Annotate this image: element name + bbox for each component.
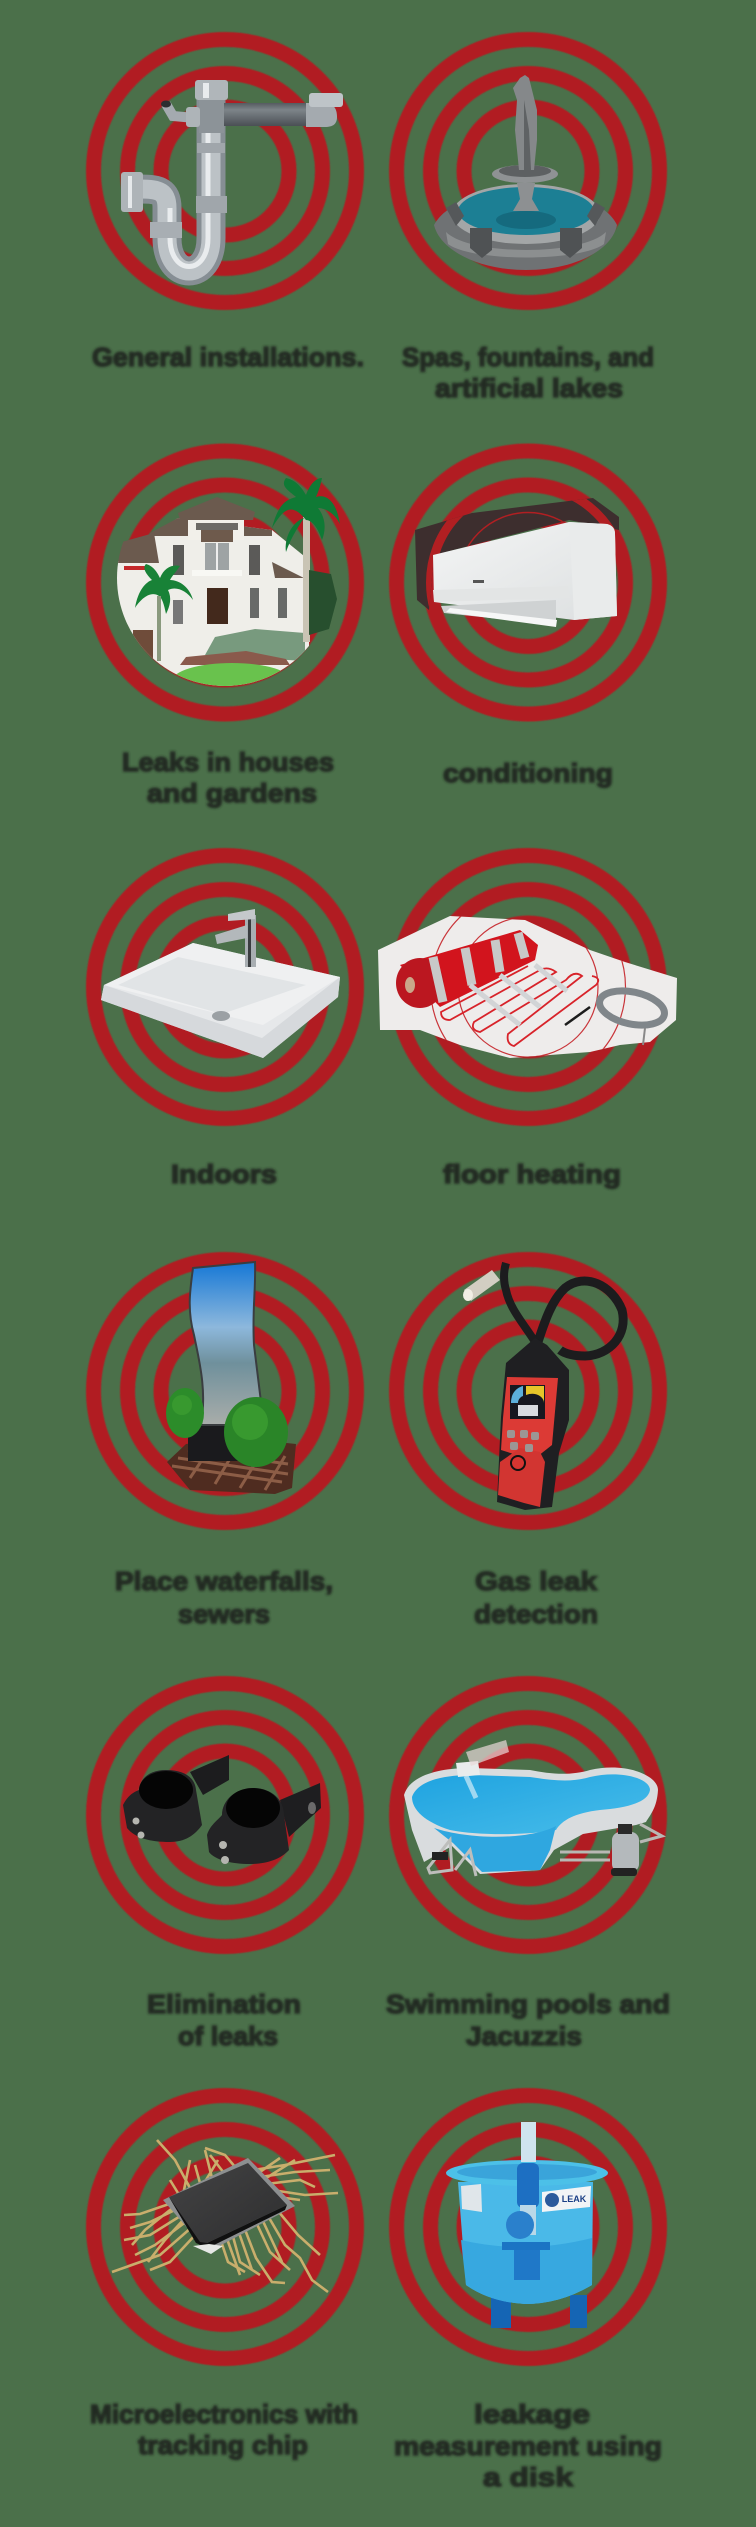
icon: black pipe clamps (123, 1755, 321, 1864)
target rings (396, 2096, 660, 2358)
label: sewers (178, 1599, 270, 1629)
label (402, 342, 654, 403)
target rings (396, 856, 660, 1118)
target rings (94, 40, 356, 302)
icon: house with palm trees (116, 478, 340, 699)
panel: floor heating (378, 856, 677, 1189)
label: Elimination (147, 1989, 301, 2019)
label: measurement using (394, 2431, 662, 2461)
panel: elimination of leaks (94, 1684, 356, 2051)
label: tracking chip (138, 2430, 308, 2460)
label: of leaks (178, 2021, 278, 2051)
label: Swimming pools and (386, 1989, 670, 2019)
icon: split air conditioner (415, 498, 619, 627)
target rings (94, 1260, 356, 1522)
label (474, 1566, 598, 1629)
icon: tracking microchip with gold traces (112, 2140, 338, 2292)
label (90, 2399, 358, 2460)
label (386, 1989, 670, 2051)
label: leakage (474, 2399, 590, 2429)
panel: swimming pools and jacuzzis (386, 1684, 670, 2051)
panel: microelectronics (90, 2096, 358, 2460)
target rings (94, 1684, 356, 1946)
icon: swimming pool with filter pump (404, 1740, 662, 1876)
label: artificial lakes (435, 373, 623, 403)
icon: blue leak measurement tank (446, 2122, 608, 2328)
label: Leaks in houses (122, 747, 334, 777)
label: Jacuzzis (466, 2021, 582, 2051)
label: Spas, fountains, and (402, 342, 654, 372)
panel: gas leak detection (396, 1260, 660, 1629)
label (394, 2399, 662, 2492)
label: and gardens (147, 778, 317, 808)
target rings (94, 2096, 356, 2358)
label (122, 747, 334, 808)
panel: leaks in houses and gardens (94, 451, 356, 808)
target rings (396, 1260, 660, 1522)
icon: chrome sink trap pipe (121, 80, 343, 271)
panel: indoors (94, 856, 356, 1189)
label: conditioning (443, 758, 613, 788)
label: Indoors (171, 1159, 277, 1189)
icon: stone fountain (434, 75, 617, 270)
icon: glass waterfall feature with shrubs (166, 1262, 296, 1494)
label: a disk (483, 2462, 574, 2492)
label: Gas leak (475, 1566, 598, 1596)
target rings (396, 451, 660, 714)
panel: spas and fountains (396, 40, 660, 403)
panel: air conditioning (396, 451, 660, 788)
panel: general installations (92, 40, 364, 372)
label: Microelectronics with (90, 2399, 358, 2429)
target rings (396, 1684, 660, 1946)
icon: floor heating mat and cable (378, 916, 677, 1058)
label: floor heating (443, 1159, 621, 1189)
icon: blue leak measurement tank: LEAK (562, 2194, 587, 2204)
label: General installations. (92, 342, 364, 372)
panel: place waterfalls, sewers (94, 1260, 356, 1629)
icon: washbasin and faucet (101, 909, 340, 1058)
label (115, 1566, 333, 1629)
panel: leakage measurement (394, 2096, 662, 2492)
target rings (94, 856, 356, 1118)
icon: handheld gas leak detector (463, 1263, 623, 1510)
label: Place waterfalls, (115, 1566, 333, 1596)
target rings (94, 451, 356, 714)
target rings (396, 40, 660, 302)
label: detection (474, 1599, 598, 1629)
label (147, 1989, 301, 2051)
